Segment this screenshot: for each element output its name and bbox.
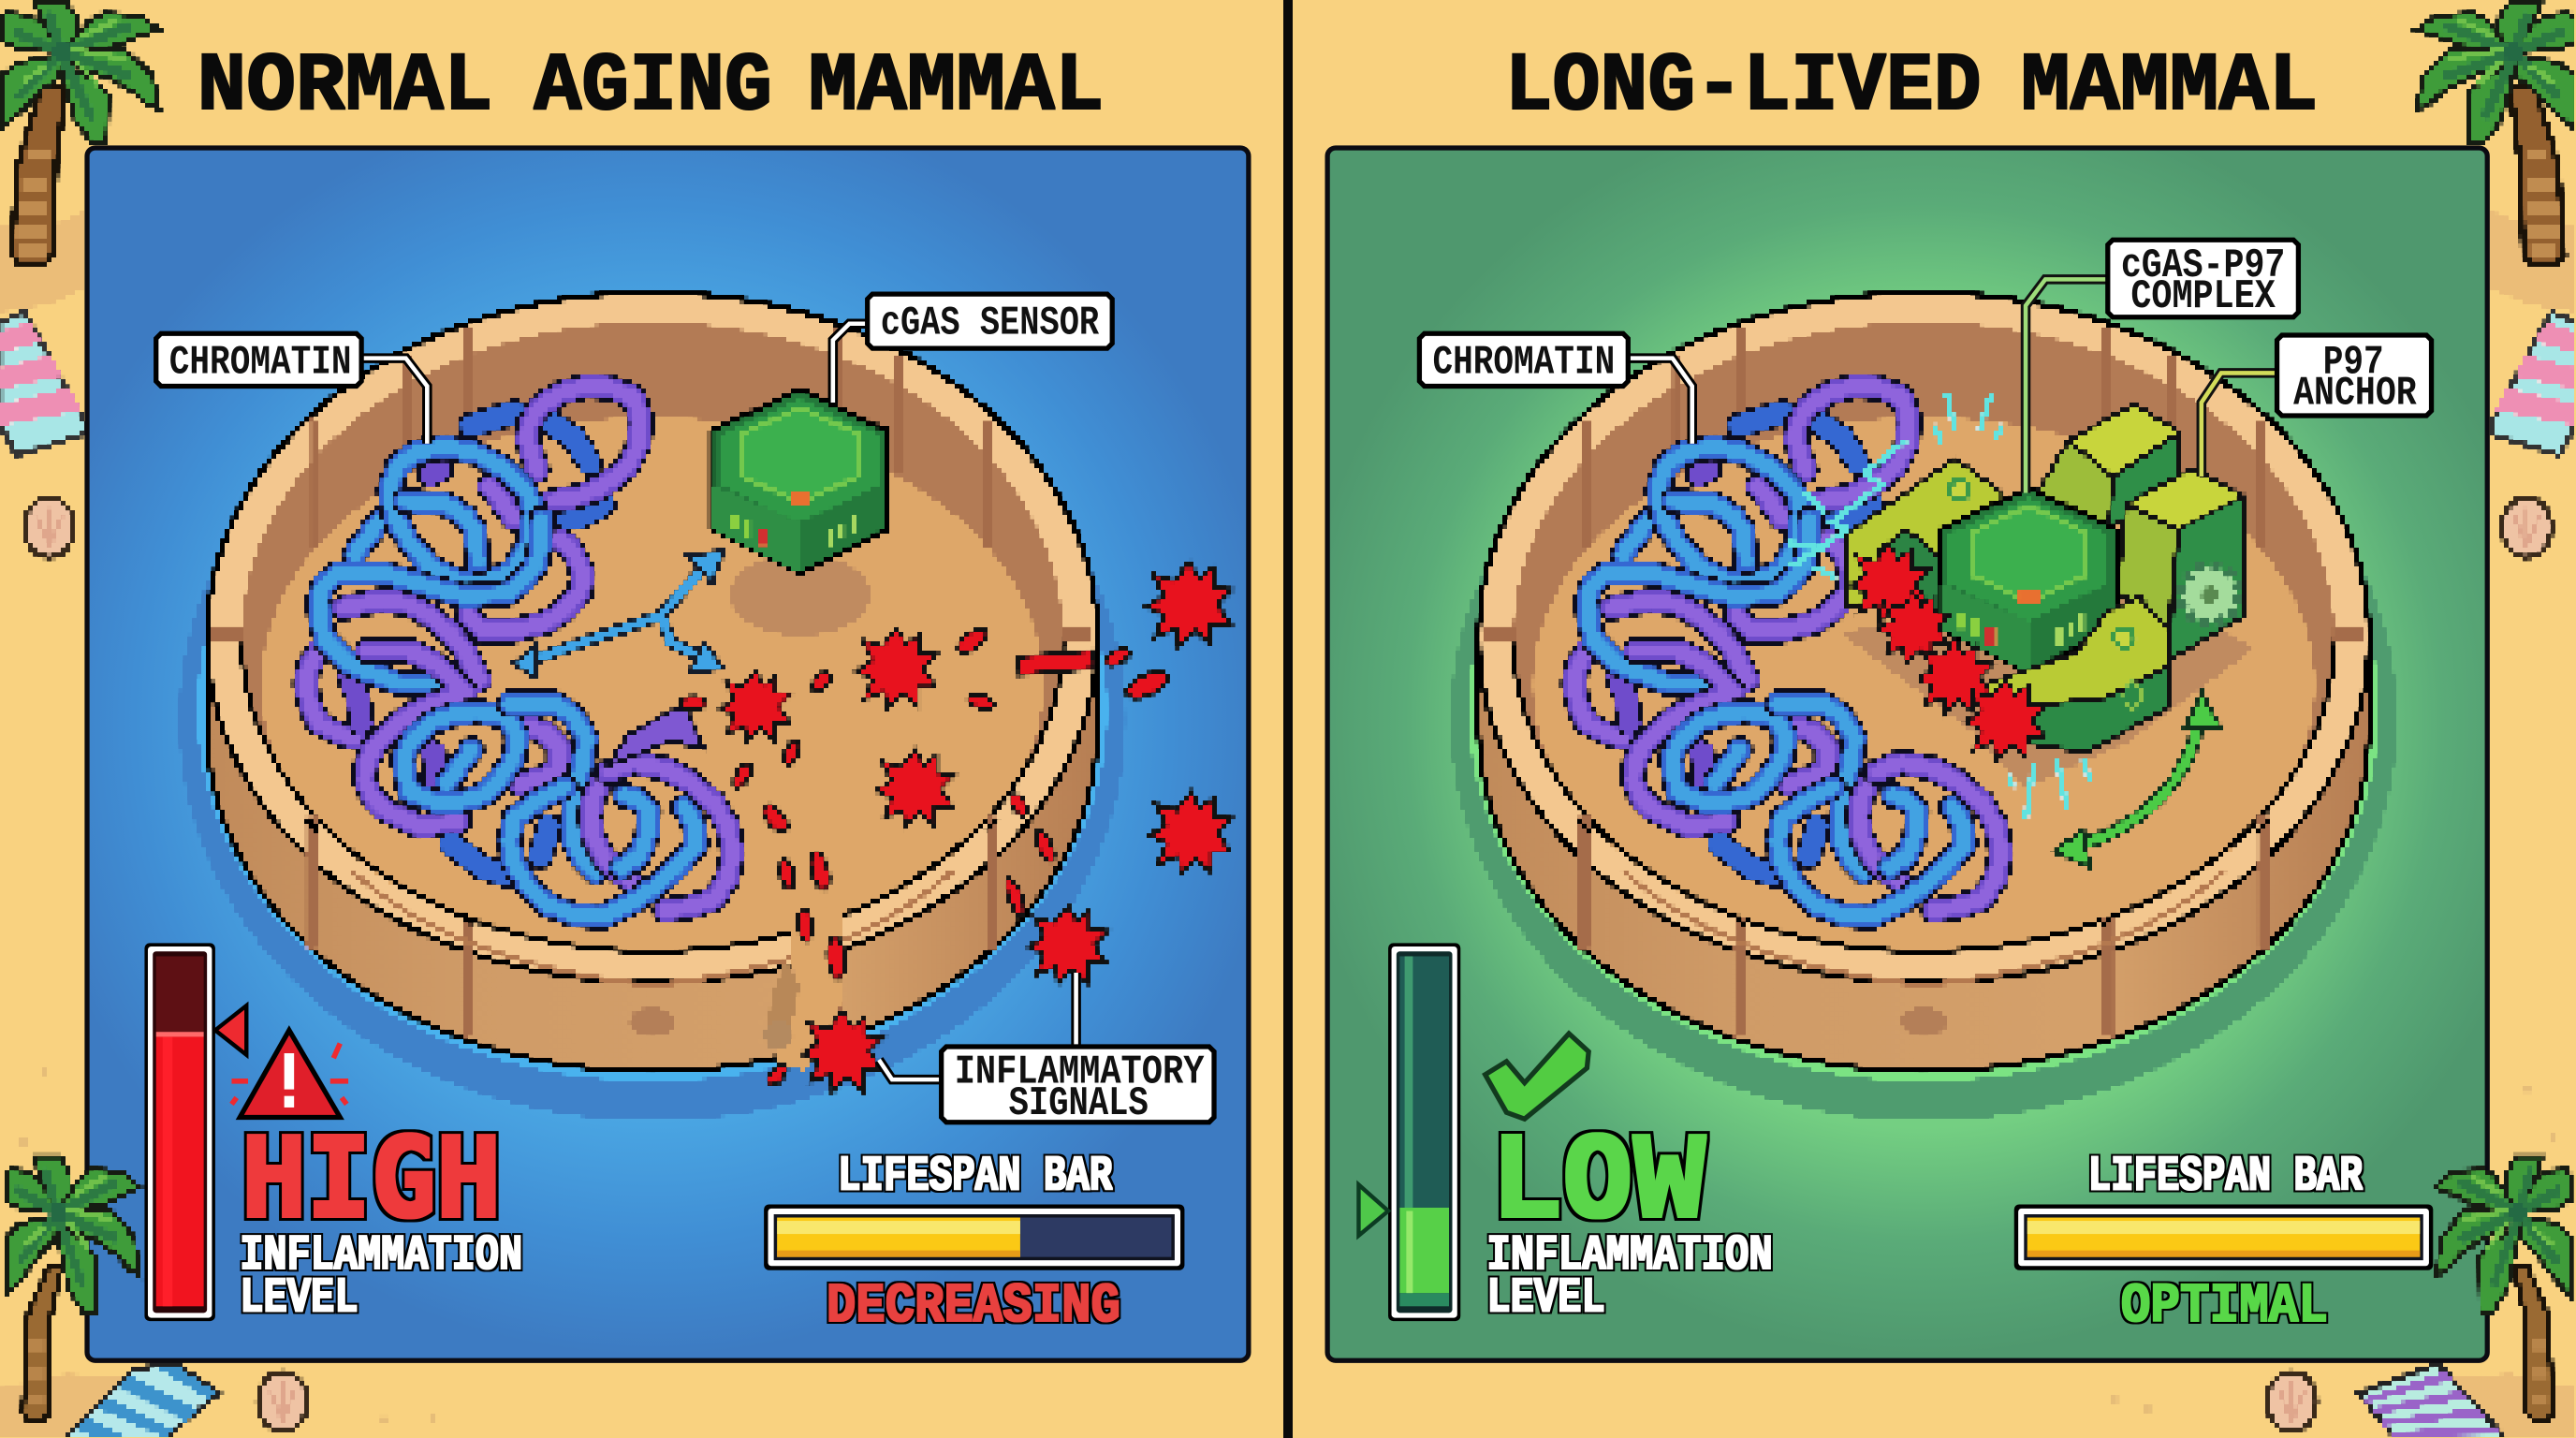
icon: top-left palm tree <box>2 2 159 263</box>
title: long-lived mammal: LONG-LIVED <box>1505 41 1982 134</box>
panel: normal aging mammal <box>87 148 1249 1360</box>
chromatin coils <box>1573 386 2001 917</box>
label: P97 anchor: P97 <box>2323 339 2384 386</box>
panel: long-lived mammal <box>1327 148 2487 1360</box>
inflammation status text: low: LOW <box>1490 1114 1705 1242</box>
cell illustration: damaged nucleus with chromatin, sensor and inflammatory signals <box>179 292 1232 1121</box>
lifespan bar: decreasing: DECREASING <box>827 1274 1120 1338</box>
icon: bottom-left palm tree <box>6 1156 139 1419</box>
cell illustration: intact nucleus with cGAS-P97 complex <box>1451 292 2397 1121</box>
inflammation status text: high <box>240 1114 522 1327</box>
label: cGAS-P97 complex <box>2026 240 2298 493</box>
title: long-lived mammal: MAMMAL <box>2021 41 2318 134</box>
icon: right pink towel <box>2491 312 2576 455</box>
label: inflammatory signals: INFLAMMATORY <box>955 1049 1205 1096</box>
inflammation status text: low <box>1486 1114 1773 1327</box>
P97 anchor upper block <box>2037 404 2180 526</box>
purple swoosh arrow <box>607 707 705 766</box>
sensor shadow <box>729 553 871 636</box>
label: cGAS-P97 complex: cGAS-P97 <box>2121 242 2285 289</box>
lifespan bar: optimal: LIFESPAN BAR <box>2088 1149 2363 1205</box>
panel background: green <box>1327 148 2487 1360</box>
icon: shells <box>24 498 2552 1431</box>
P97 left clamp <box>1847 459 2002 611</box>
inflammation gauge: low <box>1358 943 1460 1321</box>
label: chromatin <box>156 333 427 444</box>
complex shadow <box>1840 575 2254 788</box>
captured inflammatory signals <box>1850 544 2047 761</box>
P97 lower clamp <box>1986 596 2170 753</box>
nucleus wall <box>207 292 1097 1071</box>
icon: top-right palm tree <box>2417 2 2574 263</box>
label: inflammatory signals <box>879 973 1214 1127</box>
icon: left pink towel <box>0 312 85 455</box>
green exchange arrow <box>2054 692 2221 868</box>
label: chromatin: CHROMATIN <box>1432 339 1615 386</box>
label: cGAS sensor: cGAS SENSOR <box>881 300 1100 346</box>
icon: bottom-right purple towel <box>2359 1364 2506 1438</box>
label: chromatin <box>1419 333 1692 444</box>
icon: cGAS sensor <box>711 389 887 574</box>
small debris fragments <box>681 624 1170 1089</box>
label: cGAS-P97 complex: COMPLEX <box>2130 273 2276 320</box>
gauge pointer <box>1358 1184 1388 1236</box>
icon: bottom-left blue towel <box>66 1364 218 1438</box>
inflammation status text: high: INFLAMMATION <box>240 1227 522 1284</box>
title: normal aging mammal: NORMAL <box>198 41 493 134</box>
center divider <box>1283 0 1293 1438</box>
inflammation status text: high: LEVEL <box>240 1270 359 1327</box>
inflammatory signal bursts <box>720 562 1232 1093</box>
icon: central cGAS sensor <box>1940 488 2116 672</box>
title: long-lived mammal <box>1505 41 2318 134</box>
icon: warning triangle <box>231 1030 348 1117</box>
panel background: blue <box>87 148 1249 1360</box>
inflammation gauge: high <box>144 943 246 1321</box>
lifespan bar: decreasing <box>764 1149 1184 1338</box>
icon: gear <box>2182 567 2237 623</box>
label: P97 anchor <box>2202 335 2432 477</box>
gauge pointer <box>215 1005 246 1055</box>
title: normal aging mammal: AGING <box>534 41 772 134</box>
title: normal aging mammal <box>198 41 1104 134</box>
P97 anchor right block <box>2117 468 2244 661</box>
icon: bottom-right palm tree <box>2437 1156 2570 1419</box>
sand specks <box>20 1068 2556 1425</box>
label: chromatin: CHROMATIN <box>169 339 352 386</box>
inflammation status text: high: HIGH <box>242 1114 501 1242</box>
nucleus wall <box>1479 292 2369 1071</box>
icon: green check mark <box>1486 1034 1588 1119</box>
lifespan bar: decreasing: LIFESPAN BAR <box>838 1149 1113 1205</box>
label: P97 anchor: ANCHOR <box>2293 371 2417 418</box>
lifespan bar: optimal: OPTIMAL <box>2121 1274 2328 1338</box>
inflammation status text: low: LEVEL <box>1486 1270 1605 1327</box>
label: inflammatory signals: SIGNALS <box>1009 1080 1149 1127</box>
chromatin coils <box>305 386 733 917</box>
title: normal aging mammal: MAMMAL <box>809 41 1104 134</box>
bottom palm trees overlapping the panels <box>6 1156 2570 1419</box>
cyan sparks <box>1788 394 2089 818</box>
cell shadow and rim glow <box>179 318 1125 1121</box>
lifespan bar: optimal <box>2014 1149 2433 1338</box>
cell shadow and rim glow <box>1451 318 2397 1121</box>
arrows: sensor to chromatin interaction <box>513 550 724 679</box>
label: cGAS sensor <box>833 294 1112 403</box>
inflammation status text: low: INFLAMMATION <box>1486 1227 1773 1284</box>
